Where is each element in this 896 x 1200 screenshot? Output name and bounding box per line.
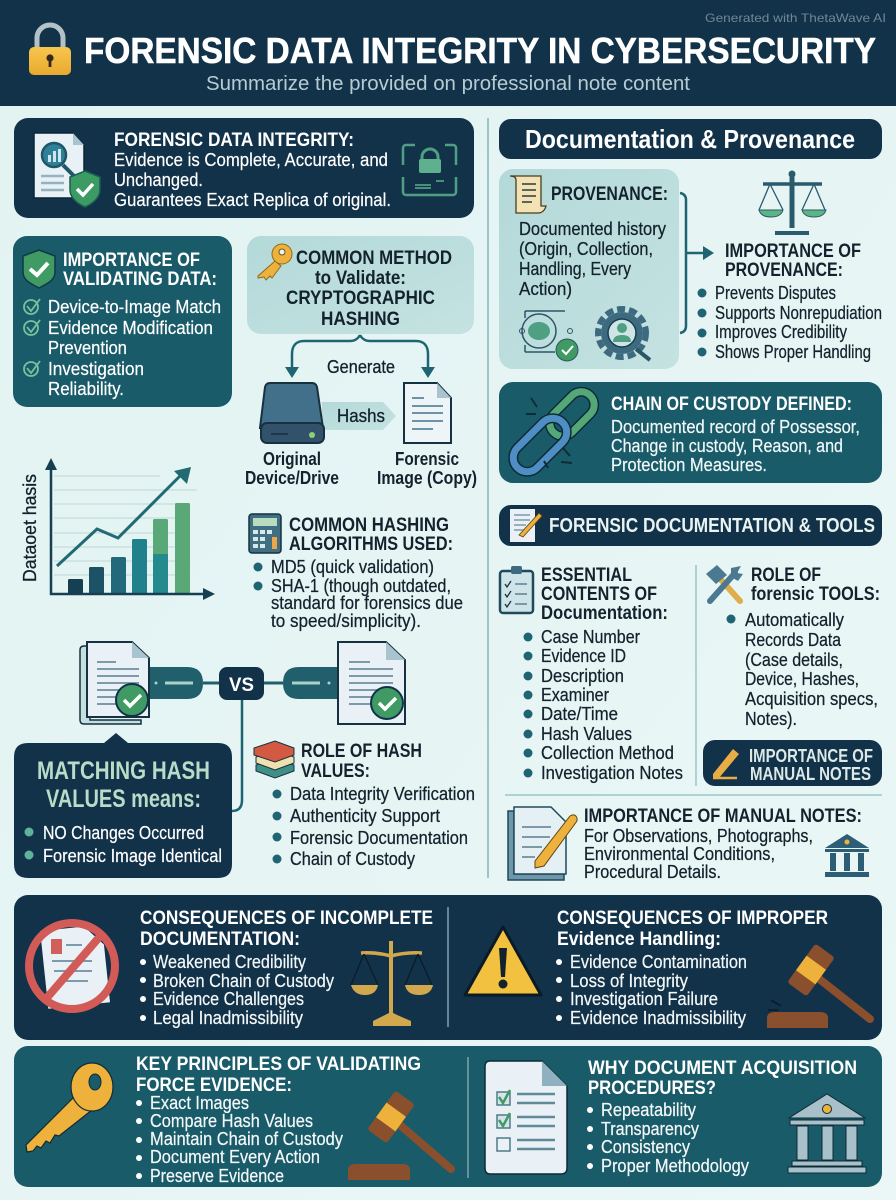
heading bar: documentation and provenance: Documentation & Provenance: [525, 124, 855, 154]
list: to speed/simplicity).: [271, 610, 421, 631]
body text: [584, 825, 813, 882]
list: Notes).: [745, 708, 797, 729]
heading bar: documentation and provenance: [499, 119, 882, 159]
list: Compare Hash Values: [150, 1110, 313, 1131]
arrow: hashs: [322, 402, 396, 430]
heading: KEY PRINCIPLES OF VALIDATING: [136, 1053, 421, 1075]
left hash pill: [147, 667, 221, 699]
list: Examiner: [541, 684, 609, 705]
heading: [751, 564, 880, 605]
icon: gear with person: [598, 309, 650, 360]
list: MD5 (quick validation): [271, 556, 434, 577]
icon: gold key: [258, 244, 292, 280]
heading: VALUES:: [301, 760, 370, 782]
label: forensic image: Image (Copy): [377, 468, 477, 488]
list: Hash Values: [541, 723, 632, 744]
heading: PROVENANCE:: [551, 183, 668, 205]
list: [524, 626, 683, 783]
panel: matching hash values: [14, 733, 232, 878]
panel: common method: [247, 236, 474, 334]
icon: padlock: [29, 25, 71, 75]
icon: globe with check: [520, 311, 578, 361]
checklist: Prevention: [48, 337, 127, 358]
heading: IMPORTANCE OF: [725, 240, 861, 262]
list: Evidence ID: [541, 645, 626, 666]
heading: MATCHING HASH: [37, 757, 210, 785]
definition text: [114, 149, 391, 210]
heading: VALUES means:: [46, 785, 201, 813]
list: Broken Chain of Custody: [153, 970, 335, 991]
heading: [289, 514, 453, 555]
vs badge: [219, 667, 264, 700]
heading: [557, 907, 828, 950]
heading: VALIDATING DATA:: [63, 268, 217, 290]
definition text: Change in custody, Reason, and: [611, 435, 843, 456]
list: Records Data: [745, 629, 842, 650]
definition text: Documented record of Possessor,: [611, 416, 860, 437]
icon: books: [254, 741, 294, 778]
panel: importance of manual notes badge: IMPORTANCE OF: [749, 746, 873, 766]
section: role of forensic tools: [706, 564, 880, 729]
list: Maintain Chain of Custody: [150, 1128, 344, 1149]
heading: DOCUMENTATION:: [140, 928, 300, 950]
list: NO Changes Occurred: [43, 822, 204, 843]
watermark: Generated with ThetaWave AI: [705, 11, 886, 25]
heading: [541, 564, 668, 624]
list: Loss of Integrity: [570, 970, 689, 991]
section: role of hash values: [254, 740, 475, 869]
list: Chain of Custody: [290, 848, 416, 869]
list: Acquisition specs,: [745, 688, 878, 709]
icon: hard drive: [260, 383, 324, 443]
list: Authenticity Support: [290, 805, 440, 826]
section: essential contents: [500, 564, 683, 783]
definition text: Guarantees Exact Replica of original.: [114, 189, 391, 210]
heading: ROLE OF HASH: [301, 740, 422, 762]
header banner: [0, 0, 896, 106]
definition text: Evidence is Complete, Accurate, and: [114, 149, 388, 170]
list: Exact Images: [150, 1092, 249, 1113]
heading: CONSEQUENCES OF INCOMPLETE: [140, 907, 433, 929]
icon: shield: [23, 250, 55, 288]
heading: CONTENTS OF: [541, 583, 657, 605]
panel: consequences: [14, 895, 882, 1040]
heading: [301, 740, 422, 782]
label: original device: Device/Drive: [245, 468, 339, 488]
icon: balance scale: [759, 170, 826, 233]
icon: prohibited document: [29, 923, 115, 1009]
comparison: hash VS hash: [80, 642, 405, 811]
list: Transparency: [601, 1118, 700, 1139]
icon: gavel: [348, 1091, 451, 1180]
list: Date/Time: [541, 703, 618, 724]
heading: HASHING: [321, 308, 400, 330]
chart: rising bars: [20, 458, 215, 600]
definition text: Protection Measures.: [611, 454, 767, 475]
heading bar: forensic documentation and tools: [499, 505, 882, 546]
body text: For Observations, Photographs,: [584, 825, 813, 846]
heading: [63, 249, 217, 290]
body text: Environmental Conditions,: [584, 843, 775, 864]
definition text: Unchanged.: [114, 169, 203, 190]
panel: importance of manual notes badge: MANUAL NOTES: [750, 764, 871, 784]
panel: chain of custody: [499, 382, 882, 483]
list: [136, 1092, 344, 1186]
heading: Evidence Handling:: [557, 928, 721, 950]
label: original device: [245, 449, 339, 488]
icon: chain link: [507, 386, 600, 478]
list: Evidence Inadmissibility: [570, 1007, 747, 1028]
heading: ALGORITHMS USED:: [289, 533, 453, 555]
panel: provenance: [499, 169, 679, 369]
heading: CONSEQUENCES OF IMPROPER: [557, 907, 828, 929]
heading: FORCE EVIDENCE:: [136, 1074, 292, 1096]
icon: scroll: [510, 176, 546, 213]
heading: PROCEDURES?: [588, 1077, 716, 1099]
definition text: [519, 218, 667, 299]
label: original device: Original: [263, 449, 321, 469]
body text: Procedural Details.: [584, 861, 721, 882]
list: Investigation Notes: [541, 762, 683, 783]
icon: calculator: [249, 514, 281, 553]
list: Legal Inadmissibility: [153, 1007, 304, 1028]
icon: forensic image document: [404, 383, 451, 443]
label: forensic image: Forensic: [395, 449, 459, 469]
label: forensic image: [377, 449, 477, 488]
icon: courthouse: [825, 834, 869, 877]
heading: COMMON HASHING: [289, 514, 449, 536]
vs badge: VS: [229, 675, 254, 696]
list: [24, 822, 222, 866]
heading: [140, 907, 433, 950]
list: Evidence Challenges: [153, 988, 304, 1009]
icon: original document check: [80, 642, 149, 724]
heading: WHY DOCUMENT ACQUISITION: [588, 1057, 857, 1079]
right hash pill: [264, 667, 340, 699]
heading: ROLE OF: [751, 564, 821, 586]
checklist: [24, 296, 221, 399]
heading: Documentation:: [541, 602, 668, 624]
checklist: Device-to-Image Match: [48, 296, 221, 317]
section: common hashing algorithms: [249, 514, 463, 631]
panel: key principles and acquisition procedures: [14, 1046, 882, 1187]
list: Preserve Evidence: [150, 1165, 284, 1186]
heading: [136, 1053, 421, 1096]
icon: clipboard: [500, 566, 533, 613]
heading: COMMON METHOD: [296, 247, 452, 269]
list: Evidence Contamination: [570, 951, 747, 972]
column divider: [487, 118, 489, 878]
list: Improves Credibility: [715, 321, 848, 342]
icon: checklist document: [485, 1061, 567, 1174]
list: (Case details,: [745, 649, 843, 670]
icon: gavel: [767, 944, 870, 1028]
list: Repeatability: [601, 1099, 697, 1120]
list: [556, 951, 747, 1028]
heading: to Validate:: [315, 267, 406, 289]
panel: forensic data integrity: [14, 118, 474, 218]
list: SHA-1 (though outdated,: [271, 575, 451, 596]
list: [698, 282, 882, 362]
icon: notes with pencil: [508, 807, 577, 880]
definition text: (Origin, Collection,: [519, 238, 653, 259]
icon: document and pencil: [510, 509, 542, 542]
list: [140, 951, 335, 1028]
heading: CRYPTOGRAPHIC: [286, 287, 435, 309]
list: [726, 609, 878, 729]
list: Automatically: [745, 609, 845, 630]
panel: importance of validating data: [13, 236, 232, 407]
arrow: generate branches: [285, 335, 435, 378]
section: importance of manual notes: [508, 805, 869, 882]
icon: courthouse: [788, 1094, 866, 1173]
definition text: Handling, Every: [519, 258, 632, 279]
heading: [588, 1057, 857, 1099]
connector: [232, 700, 242, 811]
subtitle: Summarize the provided on professional note content: [206, 73, 690, 95]
heading: PROVENANCE:: [725, 259, 843, 281]
heading: FORENSIC DATA INTEGRITY:: [114, 129, 354, 151]
list: Proper Methodology: [601, 1155, 750, 1176]
icon: gold scales: [351, 941, 433, 1026]
list: Weakened Credibility: [153, 951, 307, 972]
checklist: Investigation: [48, 358, 144, 379]
heading: CHAIN OF CUSTODY DEFINED:: [611, 393, 852, 415]
section: importance of provenance: [698, 170, 882, 362]
icon: lock frame: [403, 145, 456, 195]
panel: importance of manual notes badge: [703, 740, 882, 786]
list: Consistency: [601, 1136, 691, 1157]
definition text: Documented history: [519, 218, 667, 239]
list: Investigation Failure: [570, 988, 718, 1009]
list: Case Number: [541, 626, 640, 647]
icon: gold key: [26, 1063, 113, 1152]
list: [272, 783, 475, 869]
heading: ESSENTIAL: [541, 564, 632, 586]
icon: document with magnifier and shield: [34, 133, 100, 207]
list: [587, 1099, 750, 1176]
list: Forensic Documentation: [290, 827, 468, 848]
icon: hammer and wrench: [706, 565, 743, 601]
list: [254, 556, 463, 631]
heading: [725, 240, 861, 281]
heading: [37, 757, 210, 813]
label: chart axis: Dataoet hasis: [20, 474, 40, 582]
list: Collection Method: [541, 742, 674, 763]
list: Description: [541, 665, 624, 686]
icon: warning triangle: [465, 927, 541, 995]
heading: [286, 247, 452, 330]
list: Document Every Action: [150, 1146, 320, 1167]
list: Prevents Disputes: [715, 282, 836, 303]
definition text: [611, 416, 860, 475]
list: standard for forensics due: [271, 592, 463, 613]
icon: copy document check: [338, 642, 405, 724]
icon: gold pencil: [713, 749, 739, 778]
heading: IMPORTANCE OF: [63, 249, 200, 271]
list: Data Integrity Verification: [290, 783, 475, 804]
list: Forensic Image Identical: [43, 845, 222, 866]
label: generate: Generate: [327, 356, 395, 377]
checklist: Reliability.: [48, 378, 124, 399]
arrow: provenance to importance: [680, 193, 714, 333]
checklist: Evidence Modification: [48, 317, 213, 338]
arrow: hashs: Hashs: [337, 405, 385, 426]
list: Device, Hashes,: [745, 668, 859, 689]
definition text: Action): [519, 278, 572, 299]
